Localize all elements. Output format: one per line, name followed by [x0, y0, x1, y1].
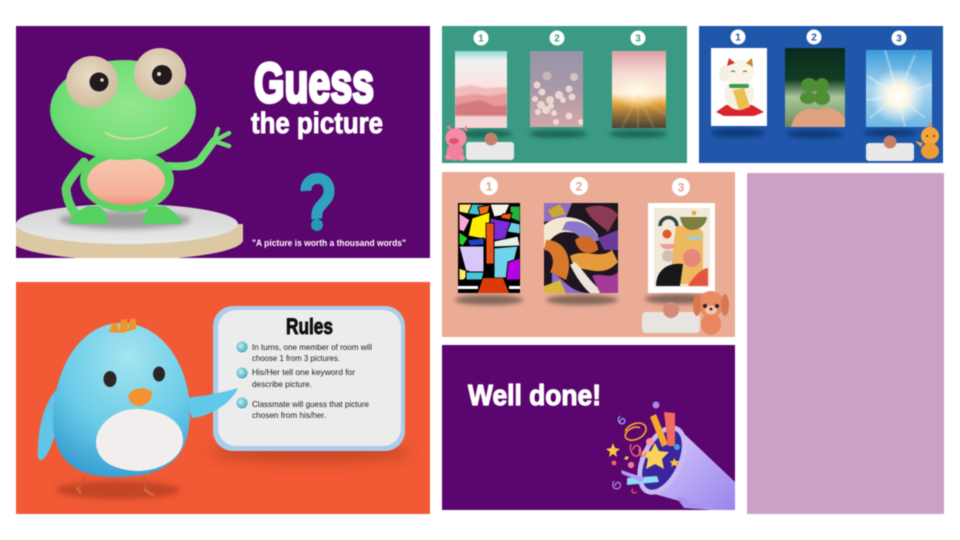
- picture 3: framed geometric art: [648, 203, 715, 293]
- panel: blue picture set: [699, 26, 943, 163]
- number badges: 3: [678, 180, 685, 194]
- heading: the picture: the picture: [251, 107, 383, 140]
- rule 2: His/Her tell one keyword for: [252, 368, 355, 377]
- icon: frog on platform: [11, 48, 243, 260]
- bird ground shadow: [56, 481, 180, 499]
- answer box: [642, 302, 700, 333]
- picture 2: abstract swirl painting: [544, 203, 618, 293]
- answer box: [466, 132, 514, 160]
- rule 1: [236, 342, 372, 363]
- rule 3: [236, 398, 369, 420]
- number badges: 2: [811, 32, 817, 44]
- panel: rules slide: [16, 282, 430, 514]
- icon: party popper: [606, 402, 735, 510]
- number badges: 3: [635, 34, 641, 44]
- number badges: 1: [486, 180, 493, 194]
- heading: Guess: Guess: [254, 51, 374, 114]
- icon: blue bird: [38, 319, 238, 495]
- picture 3: sunset: [612, 51, 666, 128]
- rule 1: In turns, one member of room will: [252, 343, 372, 352]
- number badges: [474, 30, 646, 46]
- heading: Well done!: Well done!: [468, 380, 601, 412]
- picture 1: lucky cat: [711, 48, 767, 126]
- picture 2: four-leaf clover: [785, 48, 845, 127]
- number badges: 2: [554, 34, 560, 44]
- shadows under pictures: [455, 294, 711, 305]
- panel: peach picture set: [442, 172, 735, 337]
- number badges: 1: [478, 34, 484, 44]
- rule 3: chosen from his/her.: [252, 411, 326, 420]
- number badges: [480, 177, 690, 196]
- number badges: 1: [735, 32, 741, 44]
- number badges: [730, 30, 906, 46]
- icon: pink pig: [445, 125, 467, 161]
- rule 2: describe picture.: [252, 380, 312, 389]
- heading: Rules: Rules: [286, 314, 333, 339]
- number badges: 2: [576, 180, 583, 194]
- board shadow: [210, 443, 410, 463]
- icon: brown puppy: [693, 291, 729, 335]
- panel: well done slide: [442, 345, 735, 510]
- shadows under pictures: [711, 129, 916, 138]
- panel: blank pink: [747, 173, 944, 514]
- shadows under pictures: [460, 130, 667, 138]
- picture 3: sunburst: [866, 50, 932, 127]
- rules board: [213, 306, 405, 451]
- number badges: 3: [896, 34, 902, 44]
- picture 1: stained-glass face: [458, 203, 520, 293]
- rule 3: Classmate will guess that picture: [252, 400, 369, 409]
- panel: green picture set: [442, 26, 687, 163]
- picture 2: bokeh lights: [530, 51, 584, 127]
- rule 1: choose 1 from 3 pictures.: [252, 354, 340, 363]
- rule 2: [236, 368, 355, 389]
- answer box: [866, 136, 914, 161]
- icon: question mark: [306, 178, 329, 231]
- picture 1: pink mountains: [455, 51, 507, 128]
- icon: orange chick: [915, 122, 939, 159]
- quote text: "A picture is worth a thousand words": [252, 238, 406, 249]
- panel: guess the picture title slide: [11, 26, 430, 260]
